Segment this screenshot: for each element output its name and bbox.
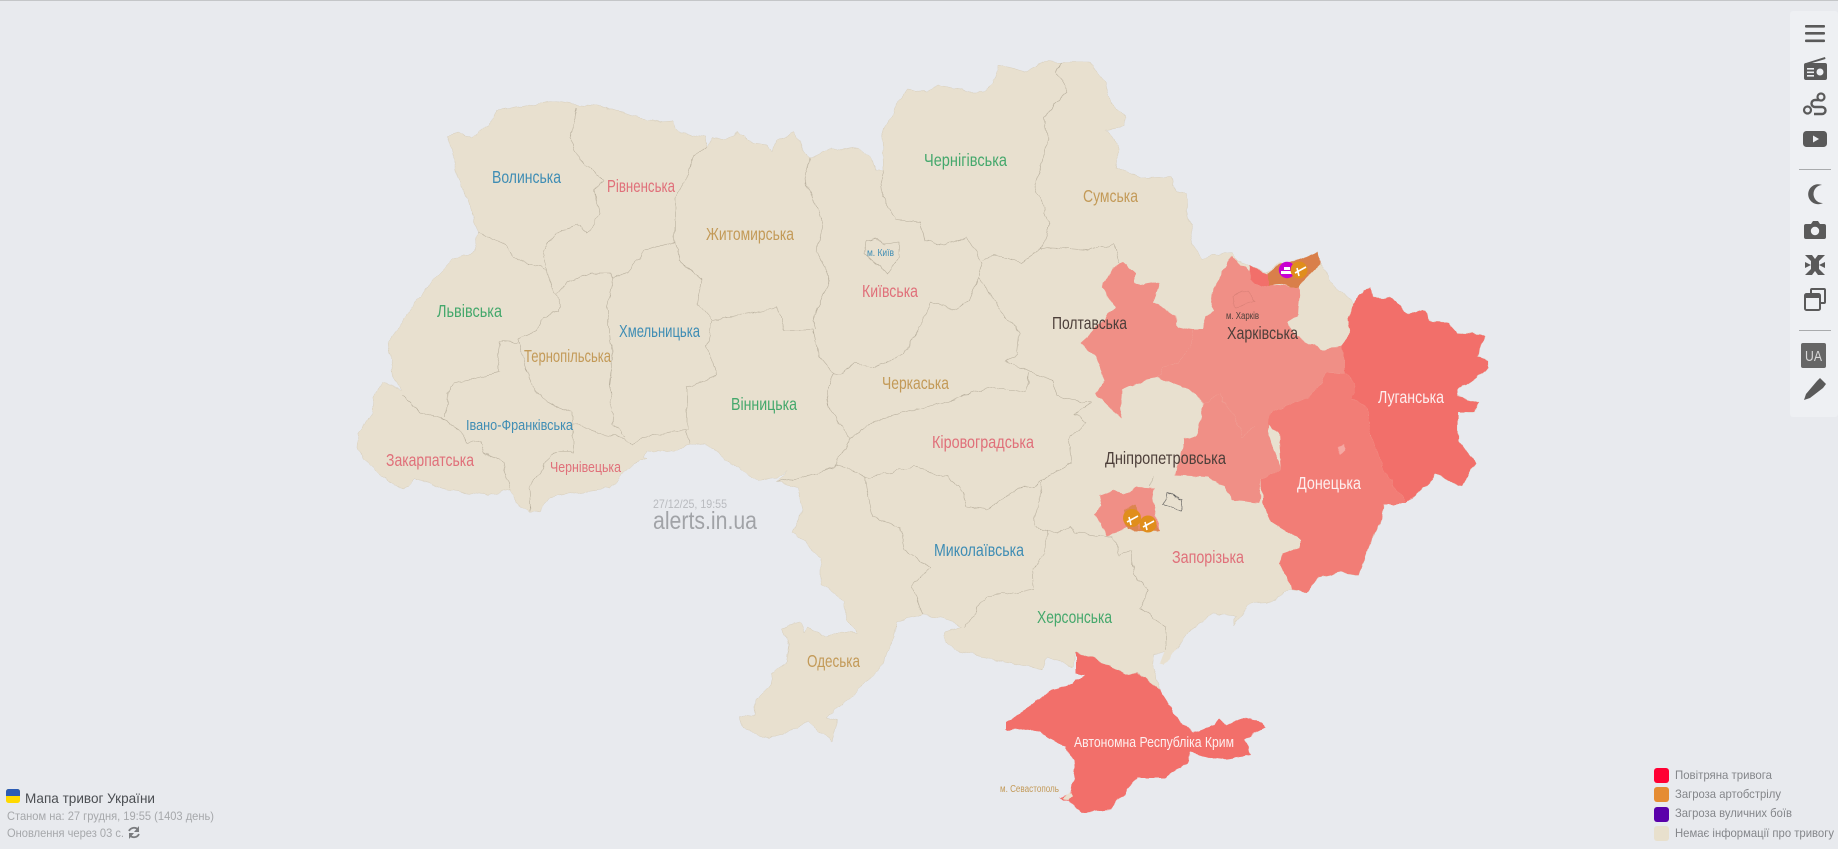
icon: language UA: UA [1805, 348, 1822, 365]
label: Kherson: Херсонська [1037, 607, 1112, 627]
icon: dark mode [1808, 184, 1823, 204]
region: Nikopol artillery threat [1124, 504, 1160, 532]
label: Khmelnytskyi: Хмельницька [619, 321, 700, 341]
icon: route [1804, 94, 1826, 114]
label: Ternopil: Тернопільська [524, 346, 611, 366]
legend item: artillery threat: Загроза артобстрілу [1675, 787, 1781, 801]
label: Crimea: Автономна Республіка Крим [1074, 734, 1234, 751]
region: northern Kharkiv air alert [1249, 265, 1268, 286]
icon: street fighting threat [1279, 262, 1295, 278]
label: Rivne: Рівненська [607, 176, 675, 196]
icon: language UA [1801, 343, 1826, 368]
label: Dnipropetrovsk: Дніпропетровська [1105, 448, 1226, 468]
region: northern Kharkiv artillery threat [1268, 251, 1320, 287]
region: Luhansk oblast alert [1341, 288, 1488, 504]
region: Dnipropetrovsk eastern districts alert [1175, 395, 1281, 503]
icon: Ukrainian flag [6, 789, 20, 803]
icon: camera [1804, 221, 1826, 239]
label: Donetsk: Донецька [1297, 473, 1361, 493]
label: Volyn: Волинська [492, 167, 561, 187]
label: Ivano-Frankivsk: Івано-Франківська [466, 417, 574, 434]
label: Mykolaiv: Миколаївська [934, 540, 1024, 560]
label: Cherkasy: Черкаська [882, 373, 949, 393]
label: Kirovohrad: Кіровоградська [932, 432, 1034, 452]
icon: artillery threat east [1140, 516, 1156, 532]
label: Zakarpattia: Закарпатська [386, 450, 474, 470]
legend [1654, 768, 1834, 841]
label: Kharkiv city: м. Харків [1226, 311, 1259, 322]
label: Kharkiv oblast: Харківська [1227, 323, 1298, 343]
status date: Станом на: 27 грудня, 19:55 (1403 день) [7, 809, 214, 823]
map: Ukraine base territory [357, 60, 1488, 742]
label: Chernivtsi: Чернівецька [550, 459, 622, 476]
region: Kharkiv oblast partial alert [1157, 256, 1345, 437]
status block [6, 789, 214, 840]
label: Sumy: Сумська [1083, 186, 1138, 206]
icon: menu [1805, 25, 1825, 42]
label: Luhansk: Луганська [1378, 387, 1444, 407]
label: Zhytomyr: Житомирська [706, 224, 794, 244]
watermark date: 27/12/25, 19:55 [653, 497, 727, 511]
label: Kyiv city: м. Київ [867, 248, 894, 259]
icon: video [1803, 131, 1827, 147]
label: Vinnytsia: Вінницька [731, 394, 797, 414]
legend item: street fighting threat: Загроза вуличних боїв [1675, 806, 1792, 820]
label: Chernihiv: Чернігівська [924, 150, 1007, 170]
icon: fullscreen [1805, 255, 1825, 275]
icon: artillery threat west [1123, 509, 1141, 527]
label: Odesa: Одеська [807, 651, 860, 671]
region: Dnipropetrovsk Nikopol district alert [1095, 487, 1160, 537]
legend item: air alert: Повітряна тривога [1675, 768, 1772, 782]
label: Zaporizhzhia: Запорізька [1172, 547, 1244, 567]
icon: refresh [129, 826, 139, 839]
watermark site name: alerts.in.ua [653, 507, 757, 535]
panel: toolbar [1790, 11, 1838, 417]
icon: radio [1804, 57, 1827, 80]
title: Мапа тривог України [25, 790, 155, 806]
region: Crimea alert [1006, 651, 1264, 813]
outline: Zaporizhzhia city [1162, 493, 1183, 510]
region: Poltava oblast partial alert [1081, 262, 1193, 418]
label: Sevastopol: м. Севастополь [1000, 784, 1059, 795]
icon: windows [1805, 289, 1825, 310]
oblast borders [403, 62, 1166, 650]
icon: pencil [1804, 378, 1826, 400]
label: Poltava: Полтавська [1052, 313, 1127, 333]
icon: artillery threat north [1290, 262, 1308, 278]
region: Donetsk oblast alert [1262, 372, 1406, 592]
label: Lviv: Львівська [437, 301, 502, 321]
label: Kyiv oblast: Київська [862, 281, 918, 301]
update countdown: Оновлення через 03 с. [7, 826, 124, 840]
